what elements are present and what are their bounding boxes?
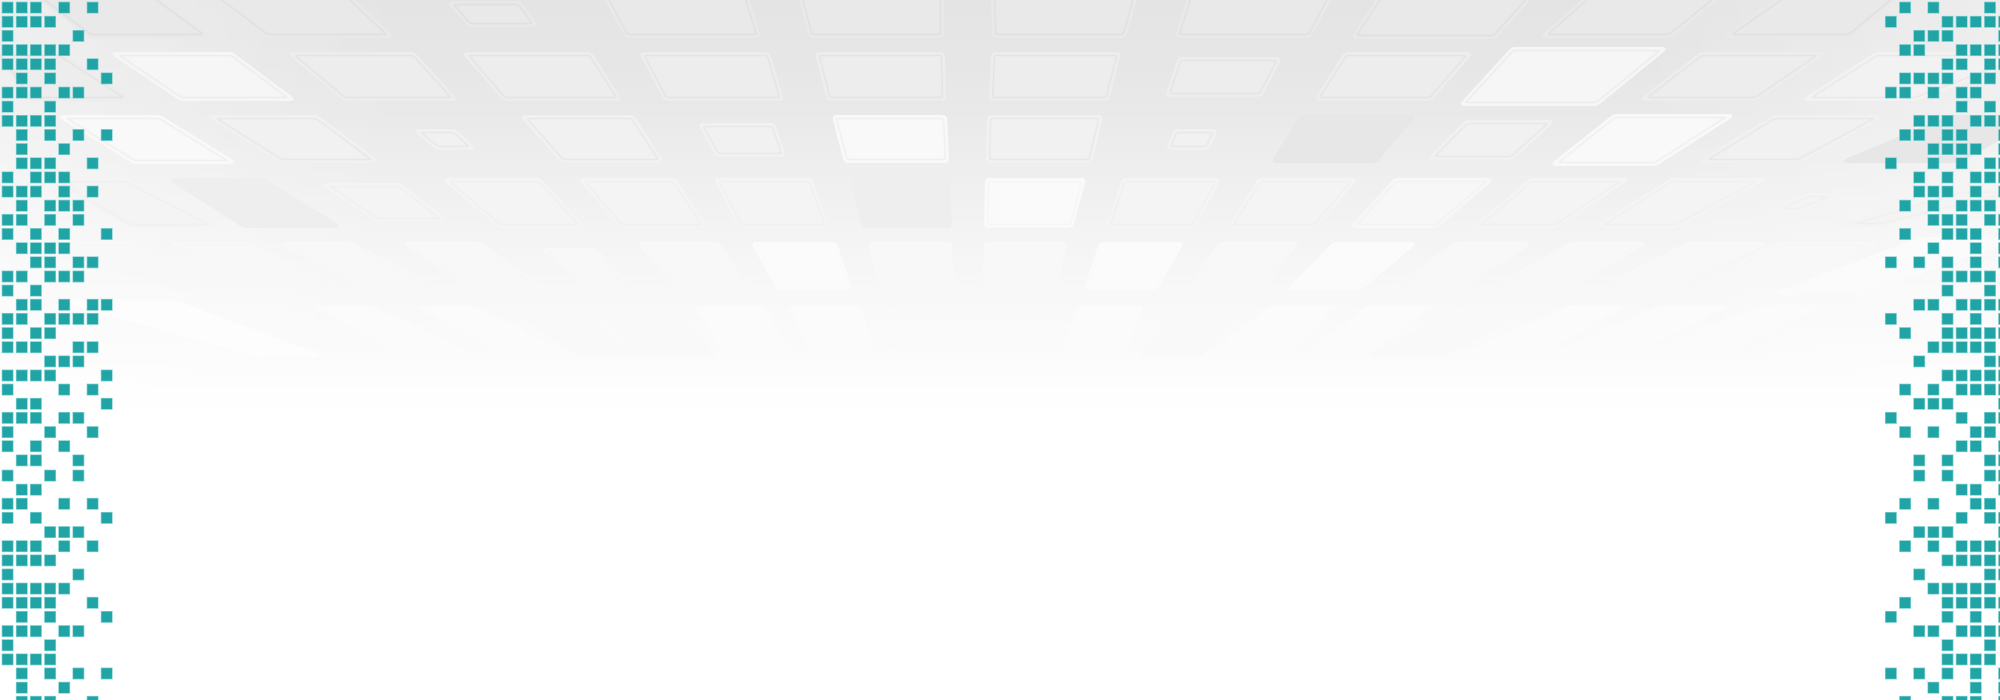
panel row B: second perspective tiles: [0, 48, 2000, 105]
panel row E: fifth perspective tiles: [40, 238, 2000, 294]
left cluster of teal squares: [2, 2, 112, 700]
dark tiles: [1272, 116, 2000, 162]
dark tiles: [169, 179, 951, 227]
panel row D: fourth perspective tiles: [50, 179, 2000, 227]
panel row A: top perspective tiles: [30, 0, 1904, 38]
background side glow: [0, 0, 2000, 420]
panel row F: faded lowest perspective tiles: [60, 301, 1820, 356]
bright tile left: [60, 301, 322, 356]
right cluster of teal squares: [1885, 2, 2000, 700]
panel row C: third perspective tiles: [58, 115, 2000, 165]
